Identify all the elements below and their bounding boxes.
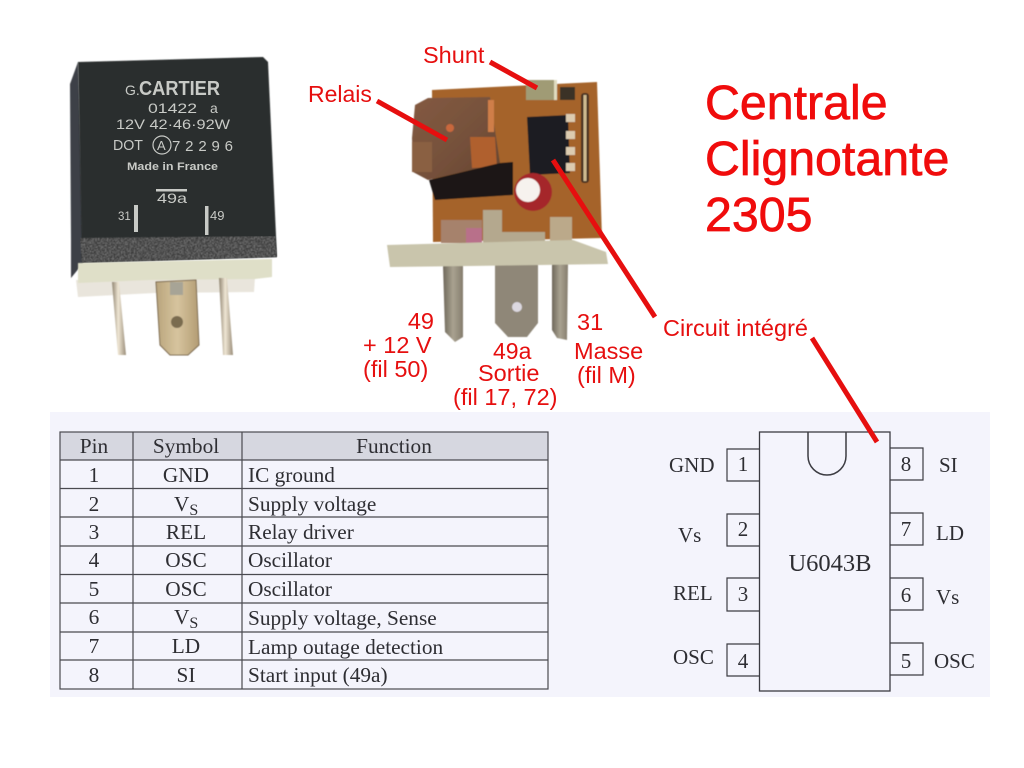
IC pin numbers: 7 [901,517,911,541]
table text: V [174,605,189,629]
IC pin numbers: 1 [738,452,748,476]
label: pin 31: (fil M) [577,362,636,388]
IC pin numbers [738,452,911,673]
title: Centrale [705,76,888,130]
table text: Symbol [153,434,219,458]
relay printed text: G. [125,82,140,98]
table text: S [189,615,198,632]
table text: 5 [89,577,99,601]
panel: datasheet background [50,412,990,697]
table text: Supply voltage, Sense [248,606,437,630]
IC pin numbers: 5 [901,649,911,673]
relay printed text: 12V 42·46·92W [116,116,231,132]
table text: Oscillator [248,577,332,601]
IC pin labels: Vs [936,585,959,609]
table text [80,434,443,687]
table header band [60,432,548,460]
label: circuit integre: Circuit intégré [663,315,808,341]
arrow: shunt [490,62,537,88]
table text: LD [172,634,200,658]
table text: 2 [89,492,99,516]
title: Clignotante [705,132,949,186]
relay black case [78,57,277,263]
arrow: circuit integre on board [553,160,655,317]
relay printed text: 01422 [148,100,197,116]
beige base [387,240,608,267]
IC pin boxes [727,448,923,676]
label: pin 31: Masse [574,338,643,364]
arrow: relais [377,101,447,140]
black component under relay [429,162,513,200]
relay grained lower band [80,236,277,263]
relay printed text: 49 [210,208,224,223]
relay printed text: A [157,138,166,153]
IC pin numbers: 8 [901,452,911,476]
table text: OSC [165,548,207,572]
relay printed text: a [210,100,218,116]
pin 49 [443,265,463,342]
label: pin 49 [363,308,434,382]
relay beige base [76,259,272,297]
IC pin labels: REL [673,581,713,605]
table text: SI [177,663,195,687]
IC pin labels: OSC [673,645,714,669]
relay printed text: Made in France [127,161,218,173]
relay printed text [113,78,233,235]
table text: Oscillator [248,548,332,572]
table text: Relay driver [248,520,354,544]
label: pin 49: + 12 V [363,332,432,358]
table text: GND [163,463,209,487]
photo: opened relay circuit board [387,80,608,342]
pin 31 [552,262,568,340]
relay printed text: 31 [118,211,131,223]
table text: Pin [80,434,109,458]
relay component [412,97,500,180]
IC pin labels: OSC [934,649,975,673]
table text: 6 [89,605,100,629]
label: pin 49a: Sortie [478,360,539,386]
integrated circuit [527,114,575,175]
circuit board [432,82,602,242]
IC pin numbers: 3 [738,582,748,606]
right metal strip [550,217,572,241]
relay centre tab [156,280,199,355]
IC pin labels: SI [939,453,958,477]
IC pin labels: GND [669,453,714,477]
table text: REL [166,520,206,544]
label: pin 49: (fil 50) [363,356,428,382]
arrow: circuit integre to pinout [812,338,877,442]
table: pin functions [60,432,548,689]
board wire link [581,93,589,183]
relay printed text: 72296 [172,138,233,155]
relay side shadow [70,62,84,278]
title: 2305 [705,188,812,242]
label: pin 49a [453,338,558,410]
pin 49a [495,263,538,337]
table text: Start input (49a) [248,663,388,687]
table text: Lamp outage detection [248,635,443,659]
label: pin 49a: 49a [493,338,532,364]
shunt [526,80,575,100]
table text: 1 [89,463,99,487]
table text: 3 [89,520,99,544]
relay printed text: CARTIER [139,78,221,100]
table text: 8 [89,663,99,687]
table text: S [189,502,198,519]
IC body outline [760,432,890,691]
IC pin labels [669,453,975,673]
middle pin metal strip [483,210,545,243]
table text: V [174,492,189,516]
IC notch [808,432,846,475]
relay printed text: DOT [113,137,143,154]
table text: Supply voltage [248,492,376,516]
IC pin labels: LD [936,521,964,545]
label: pin 31 [574,309,643,388]
table grid [60,432,548,689]
title [705,76,949,242]
table text: IC ground [248,463,335,487]
table text: 7 [89,634,100,658]
table text: OSC [165,577,207,601]
IC pin numbers: 4 [738,649,749,673]
IC pin labels: Vs [678,523,701,547]
table text: Function [356,434,432,458]
label: relais: Relais [308,81,372,107]
label: pin 31: 31 [577,309,603,335]
relay right pin [219,278,233,355]
photo: closed relay G.Cartier [70,57,277,355]
relay left pin [112,282,126,355]
left metal strip [441,220,482,243]
IC name: U6043B [788,550,872,577]
capacitor [514,173,552,211]
IC pin numbers: 2 [738,517,748,541]
relay printed text: 49a [157,190,187,206]
label: shunt: Shunt [423,42,485,68]
label: pin 49: 49 [408,308,434,334]
chart: U6043B IC pinout [669,432,975,691]
IC pin numbers: 6 [901,583,911,607]
label: pin 49a: (fil 17, 72) [453,384,558,410]
table text: 4 [89,548,100,572]
